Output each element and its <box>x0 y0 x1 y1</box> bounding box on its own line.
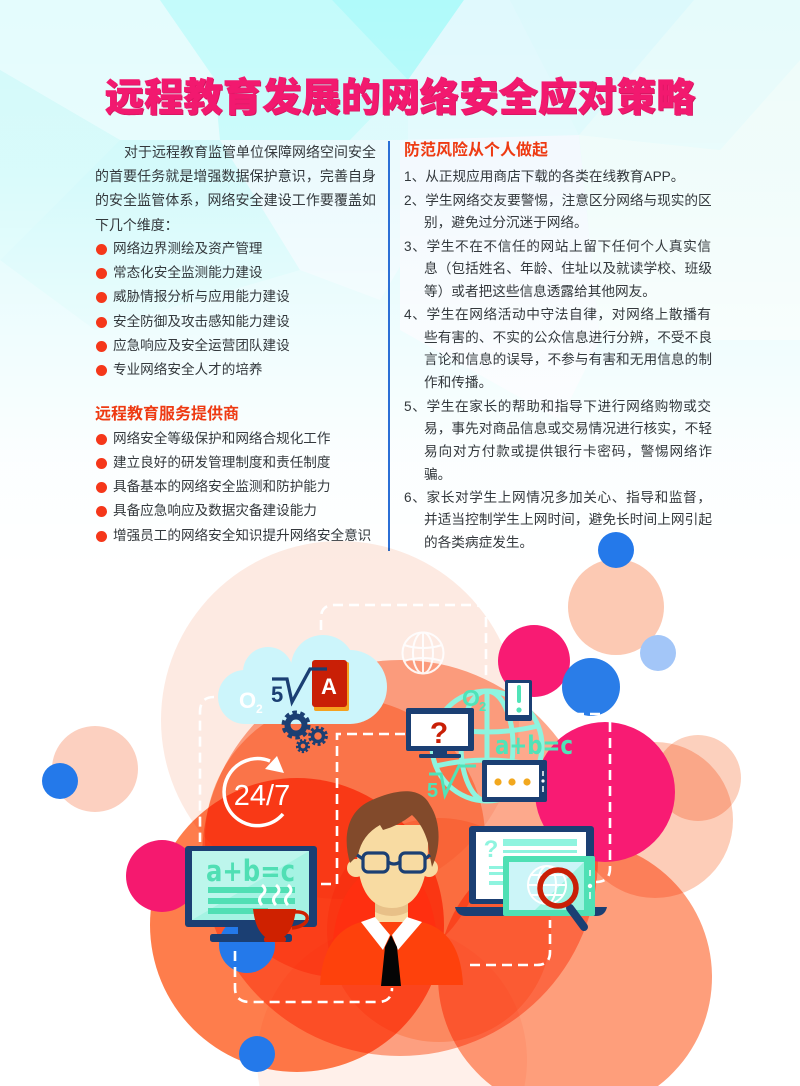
text block: intro paragraph: 的安全监管体系，网络安全建设工作要覆盖如 <box>95 192 376 208</box>
numbered list: personal prevention: 别，避免过分沉迷于网络。 <box>424 215 588 230</box>
bullet list: service providers: 具备应急响应及数据灾备建设能力 <box>113 503 317 518</box>
bullet list: service providers: 网络安全等级保护和网络合规化工作 <box>113 431 330 446</box>
numbered list: personal prevention: 的各类病症发生。 <box>424 535 533 550</box>
numbered list: personal prevention: 骗。 <box>424 467 451 482</box>
numbered list: personal prevention: 6、家长对学生上网情况多加关心、指导和监督， <box>404 490 711 505</box>
icon: cloud with formula and book: 5 <box>271 682 283 707</box>
text block: intro paragraph: 的首要任务就是增强数据保护意识，完善自身 <box>95 168 376 184</box>
text block: intro paragraph <box>95 144 376 233</box>
bullet list: service providers: 具备基本的网络安全监测和防护能力 <box>113 479 330 494</box>
numbered list: personal prevention: 4、学生在网络活动中守法自律，对网络上散播有 <box>404 307 711 322</box>
icon: desktop with formula and cup: a+b=c <box>206 854 295 888</box>
heading: personal prevention: 防范风险从个人做起 <box>404 142 548 159</box>
icon: network globe with formulas: 2 <box>479 699 486 714</box>
icon: cloud with formula and book <box>218 635 387 724</box>
numbered list: personal prevention: 等）或者把这些信息透露给其他网友。 <box>424 284 656 299</box>
dashed connector lines <box>200 605 610 1002</box>
icon: network globe with formulas: 5 <box>427 780 438 802</box>
numbered list: personal prevention: 并适当控制学生上网时间，避免长时间上网引起 <box>424 512 712 527</box>
numbered list: personal prevention: 易，事先对商品信息或交易情况进行核实，不轻 <box>424 421 712 436</box>
icon: question monitor: ? <box>430 717 448 750</box>
text block: intro paragraph: 对于远程教育监管单位保障网络空间安全 <box>124 144 376 160</box>
icon: gears <box>284 712 326 752</box>
icon: phone with exclamation <box>505 680 532 721</box>
icon: 24/7 clock: 24/7 <box>234 780 290 812</box>
bullet list: monitoring dimensions: 安全防御及攻击感知能力建设 <box>113 314 290 329</box>
icon: person with glasses <box>320 791 463 986</box>
bullet list: monitoring dimensions: 专业网络安全人才的培养 <box>113 362 263 377</box>
overlapping circles backdrop <box>42 532 741 1086</box>
numbered list: personal prevention: 3、学生不在不信任的网站上留下任何个人真实信 <box>404 239 711 254</box>
icon: cloud with formula and book: A <box>321 674 337 699</box>
bullet list: monitoring dimensions: 威胁情报分析与应用能力建设 <box>113 289 290 304</box>
icon: network globe with formulas <box>427 685 573 802</box>
numbered list: personal prevention: 易向对方付款或提供银行卡密码，警惕网络诈 <box>424 444 712 459</box>
numbered list: personal prevention: 2、学生网络交友要警惕，注意区分网络与现实的区 <box>404 193 712 208</box>
icon: globe outline <box>402 632 444 674</box>
numbered list: personal prevention: 作和传播。 <box>424 375 492 390</box>
title: 远程教育发展的网络安全应对策略 <box>105 76 695 120</box>
icon: network globe with formulas: a+b=c <box>495 731 573 761</box>
numbered list: personal prevention <box>404 169 712 550</box>
bullet list: monitoring dimensions: 常态化安全监测能力建设 <box>113 265 263 280</box>
icon: laptop with tablet and magnifier <box>455 826 607 927</box>
bullet list: monitoring dimensions: 网络边界测绘及资产管理 <box>113 241 263 256</box>
icon: cloud with formula and book: 2 <box>256 702 263 716</box>
bullet list: service providers: 增强员工的网络安全知识提升网络安全意识 <box>113 528 371 543</box>
bullet list: monitoring dimensions: 应急响应及安全运营团队建设 <box>113 338 290 353</box>
text block: intro paragraph: 下几个维度： <box>95 217 179 233</box>
bullet list: monitoring dimensions <box>96 241 290 377</box>
bullet list: service providers: 建立良好的研发管理制度和责任制度 <box>113 455 330 470</box>
icon: 24/7 clock <box>224 756 290 826</box>
numbered list: personal prevention: 言论和信息的误导，不参与有害和无用信息的制 <box>424 352 712 367</box>
heading: service providers: 远程教育服务提供商 <box>95 406 239 423</box>
icon: desktop with formula and cup <box>185 846 317 942</box>
numbered list: personal prevention: 些有害的、不实的公众信息进行分辨，不受不良 <box>424 330 712 345</box>
icon: laptop with tablet and magnifier: ? <box>484 836 498 863</box>
icon: cloud with formula and book: O <box>239 688 256 713</box>
icon: question monitor <box>406 708 474 758</box>
icon: network globe with formulas: O <box>462 685 480 711</box>
numbered list: personal prevention: 息（包括姓名、年龄、住址以及就读学校、班级 <box>424 261 712 276</box>
bullet list: service providers <box>96 431 371 543</box>
icon: tablet with dots <box>482 760 547 802</box>
numbered list: personal prevention: 1、从正规应用商店下载的各类在线教育APP。 <box>404 169 684 184</box>
numbered list: personal prevention: 5、学生在家长的帮助和指导下进行网络购物或交 <box>404 399 711 414</box>
